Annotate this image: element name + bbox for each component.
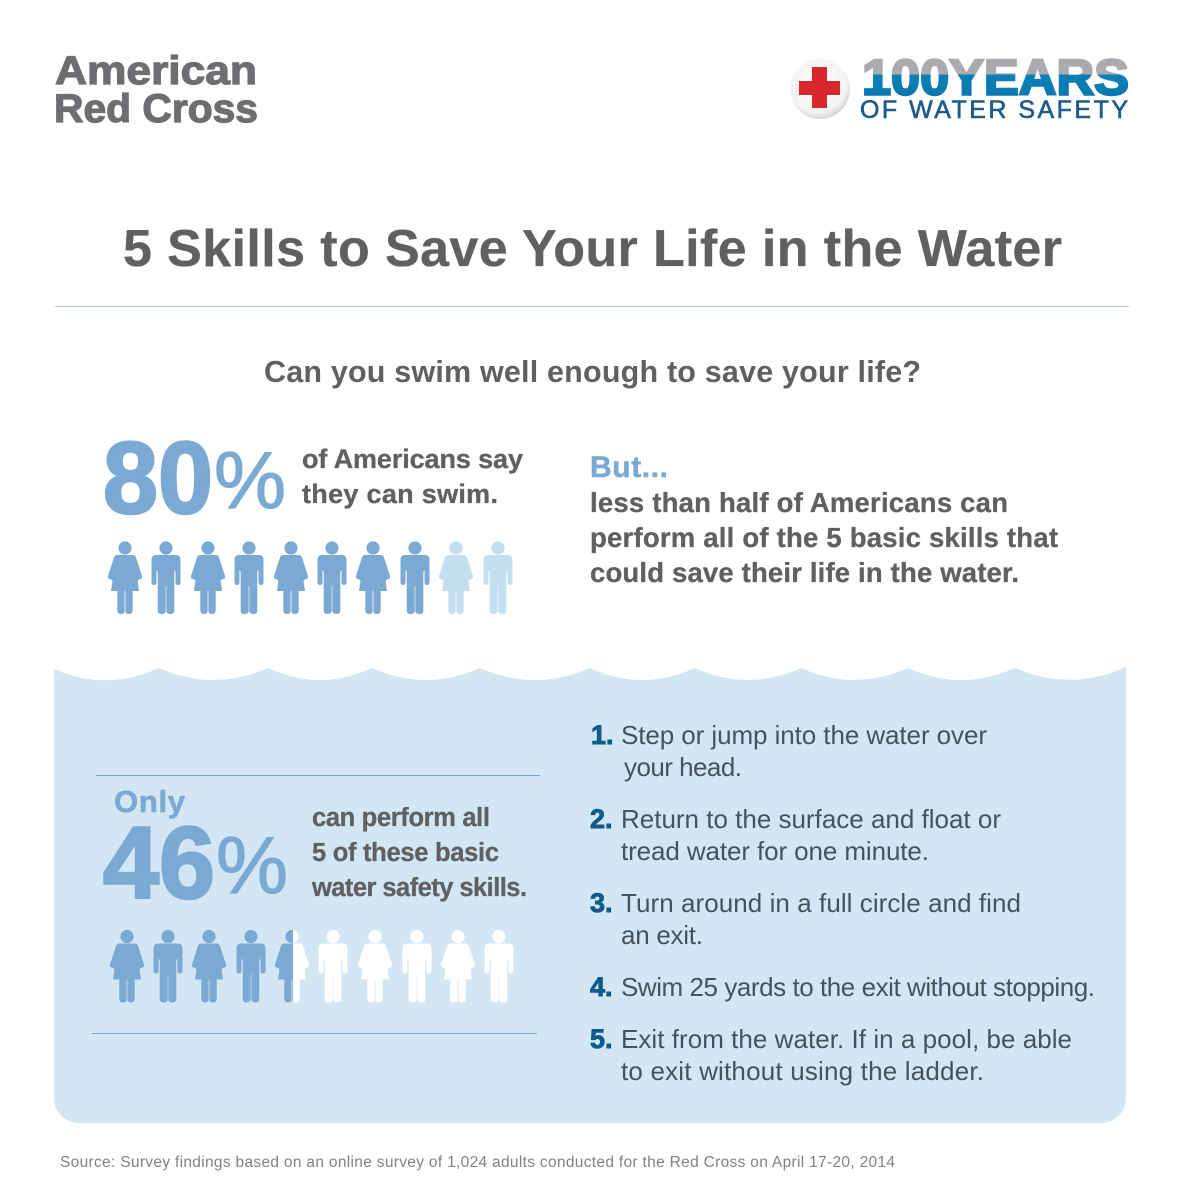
- skill 1: Step or jump into the water over: [621, 720, 987, 750]
- callout: but less than half: [590, 451, 1058, 588]
- callout lead: But...: [590, 451, 668, 484]
- source note: Source: Survey findings based on an online survey of 1,024 adults conducted for the Red Cross on April 17-20, 2014: [60, 1154, 895, 1171]
- logo: American Red Cross wordmark: [54, 49, 258, 131]
- big number 46%: %: [216, 821, 288, 911]
- skill 3: an exit.: [621, 920, 703, 950]
- skill 1: 1.: [591, 720, 614, 750]
- callout body: perform all of the 5 basic skills that: [590, 522, 1058, 553]
- skill 3: Turn around in a full circle and find: [621, 888, 1021, 918]
- big number 80%: %: [214, 436, 286, 526]
- stat description: water safety skills.: [311, 874, 527, 902]
- big number 46%: 46: [103, 806, 215, 920]
- logo text: of water safety: OF WATER SAFETY: [860, 96, 1128, 124]
- skill 5: 5.: [590, 1024, 613, 1054]
- stat description: [311, 804, 527, 902]
- stat description: [302, 444, 523, 509]
- skill 5: to exit without using the ladder.: [621, 1056, 984, 1086]
- logo: American Red Cross wordmark: American: [55, 49, 257, 93]
- callout body: [590, 487, 1058, 588]
- title: 5 Skills to Save Your Life in the Water: [123, 220, 1062, 278]
- logo: 100 Years of Water Safety: [790, 50, 1129, 124]
- skill 1: [591, 720, 987, 782]
- big number 80%: 80: [103, 421, 213, 535]
- stat: 80 percent: [103, 421, 523, 535]
- skill 5: [590, 1024, 1072, 1086]
- pictogram: 4.6 of 10 people can perform all skills: [110, 930, 514, 1002]
- skill 2: Return to the surface and float or: [621, 804, 1001, 834]
- icon: red cross button: [790, 59, 850, 119]
- logo: American Red Cross wordmark: Red Cross: [54, 87, 258, 131]
- stat: only 46 percent: [103, 784, 527, 920]
- list: five water safety skills: [590, 720, 1095, 1086]
- stat description: can perform all: [312, 804, 490, 832]
- label only: Only: [114, 784, 186, 819]
- skill 4: 4.: [590, 972, 613, 1002]
- skill 4: Swim 25 yards to the exit without stopping.: [621, 972, 1095, 1002]
- callout body: less than half of Americans can: [590, 487, 1008, 518]
- skill 3: 3.: [590, 888, 613, 918]
- skill 2: 2.: [590, 804, 613, 834]
- skill 2: [590, 804, 1001, 866]
- stat description: 5 of these basic: [312, 839, 499, 867]
- skill 5: Exit from the water. If in a pool, be able: [621, 1024, 1072, 1054]
- skill 1: your head.: [624, 752, 742, 782]
- logo text: 100 years: 100YEARS: [862, 50, 1129, 106]
- stat description: they can swim.: [302, 479, 498, 509]
- panel: water background: [54, 667, 1126, 1123]
- subtitle question: Can you swim well enough to save your life?: [264, 355, 921, 389]
- stat description: of Americans say: [302, 444, 523, 474]
- pictogram: 8 of 10 people say they can swim: [108, 541, 512, 614]
- skill 3: [590, 888, 1021, 950]
- callout body: could save their life in the water.: [590, 557, 1019, 588]
- skill 2: tread water for one minute.: [621, 836, 929, 866]
